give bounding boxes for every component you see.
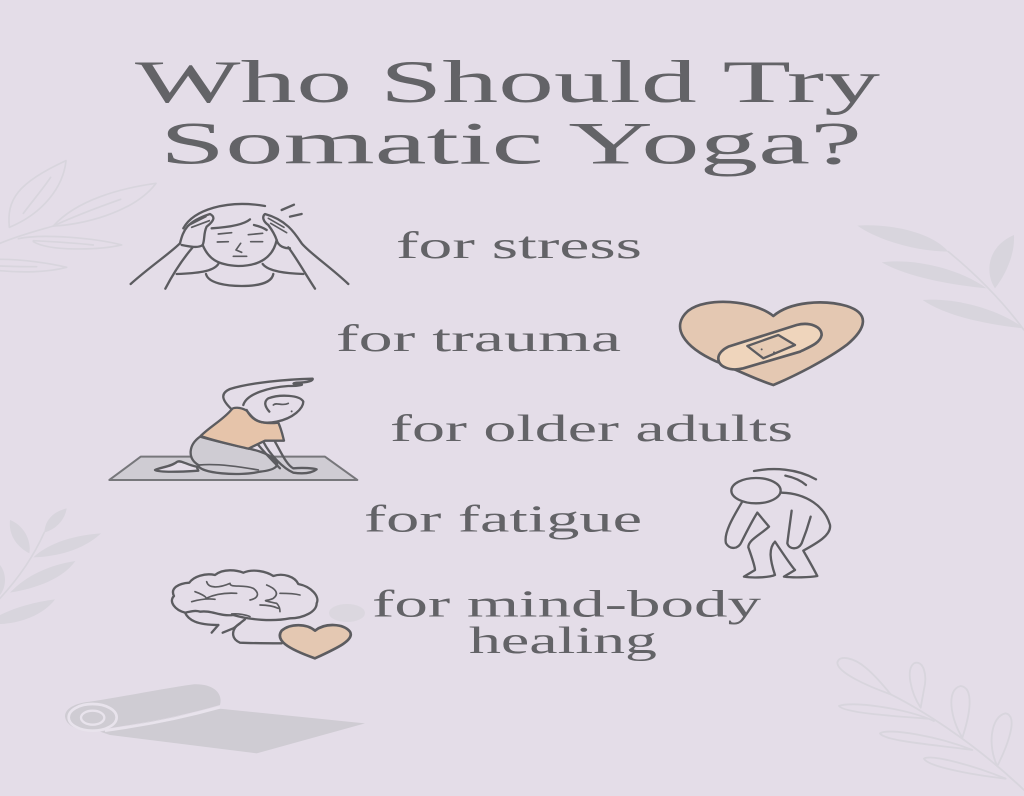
mat bbox=[109, 457, 357, 480]
brain stem bbox=[212, 619, 245, 633]
raised arm bbox=[223, 379, 313, 409]
legs bbox=[191, 437, 277, 474]
label: for mind-body healing: for mind-body bbox=[372, 584, 761, 626]
foot bbox=[155, 461, 198, 472]
decorative outlined leaves bottom right bbox=[837, 658, 1024, 790]
label: for older adults: for older adults bbox=[390, 408, 793, 450]
decorative solid leaves top right bbox=[857, 225, 1024, 330]
heart bbox=[280, 625, 351, 658]
icon: brain with heart bbox=[172, 570, 351, 658]
brain bbox=[172, 570, 317, 625]
supporting arm bbox=[263, 442, 317, 473]
icon: fatigued person bent over bbox=[726, 469, 830, 577]
decorative solid leaves left bbox=[0, 508, 101, 624]
icon: person stretching on yoga mat bbox=[109, 379, 357, 480]
decorative outlined leaves top left bbox=[0, 161, 156, 272]
label: for trauma: for trauma bbox=[336, 318, 621, 360]
decorative blur spot near heart bbox=[329, 604, 365, 622]
shirt bbox=[201, 408, 284, 449]
title bbox=[135, 49, 880, 176]
rolled yoga mat bbox=[65, 684, 365, 753]
icon: stressed person holding head bbox=[131, 204, 348, 289]
head bbox=[247, 396, 303, 423]
label: for mind-body healing: healing bbox=[469, 620, 657, 662]
title: Who Should Try bbox=[135, 49, 880, 115]
icon: heart with bandage bbox=[680, 302, 863, 385]
far arm bbox=[258, 445, 280, 468]
label: for fatigue: for fatigue bbox=[364, 498, 642, 540]
label: for mind-body healing bbox=[372, 584, 761, 662]
label: for stress: for stress bbox=[396, 225, 642, 267]
title: Somatic Yoga? bbox=[160, 110, 862, 176]
